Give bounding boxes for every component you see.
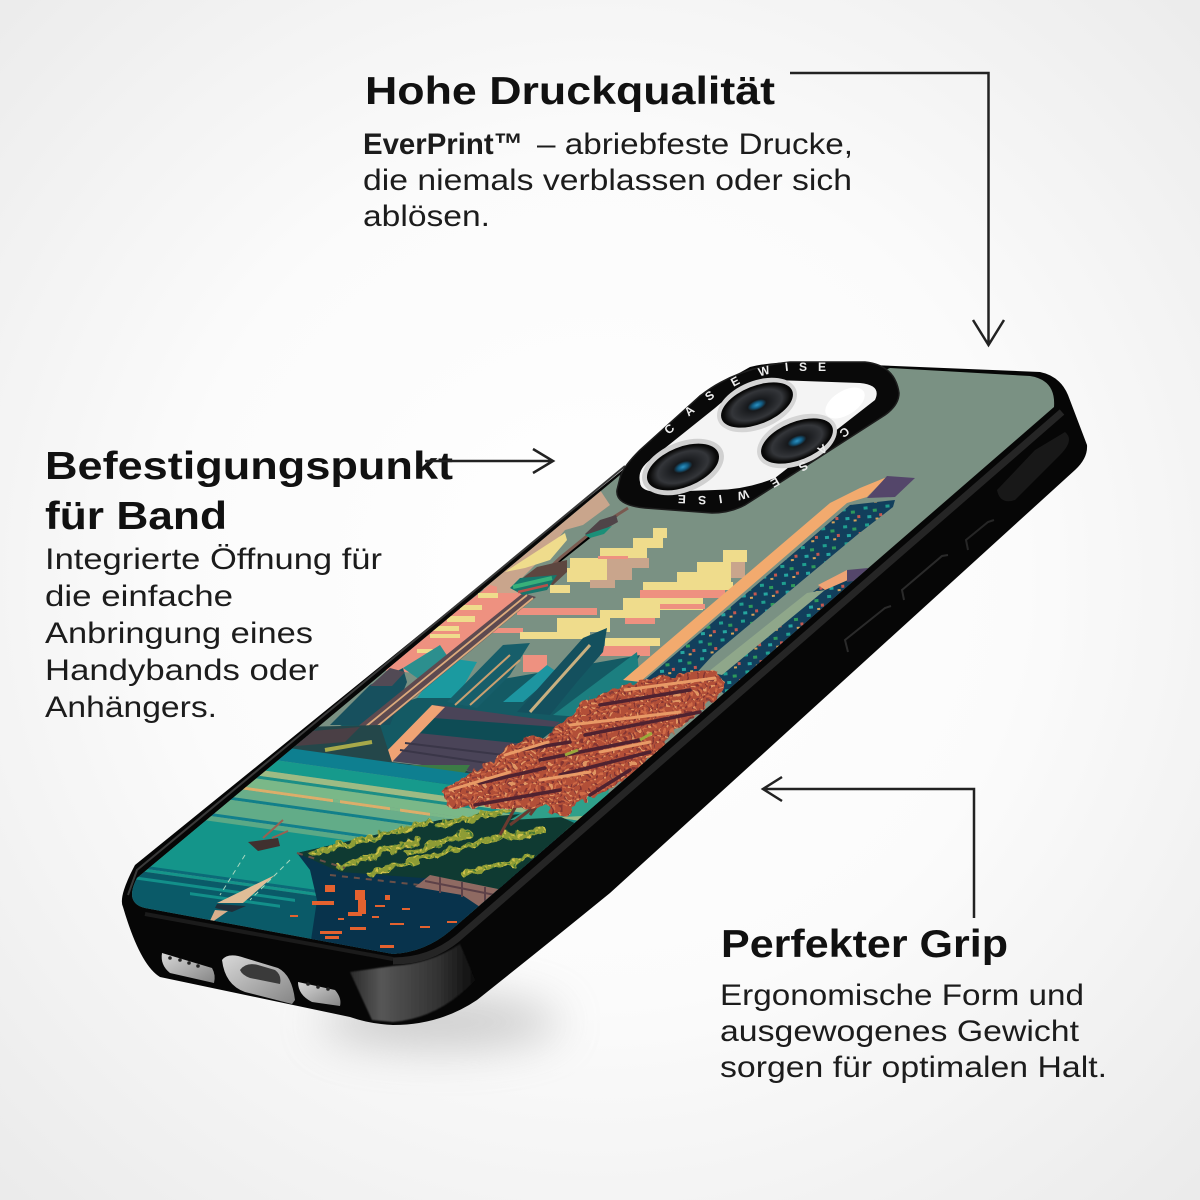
brand ring lettering: E [678,492,686,506]
rim bottom edge [145,914,393,959]
side mute switch [997,432,1069,501]
second skyscraper [705,568,868,700]
brand ring lettering: A [682,403,698,419]
plate shine [820,381,870,425]
heading: Hohe Druckqualität [365,70,775,113]
body text: Handybands oder [45,654,319,687]
tower needle and neck [552,506,629,564]
foliage highlights [450,678,715,790]
side button: volume down [845,606,891,652]
main pod [520,560,567,585]
callout: Perfekter Grip [720,923,1107,1084]
brand ring lettering: C [836,424,852,441]
brand ring lettering: E [818,360,826,374]
skyline [330,628,640,760]
teal gaps beside tree [510,788,610,820]
dark bush mass [300,814,574,892]
right speaker grille [298,982,340,1006]
sky [132,368,1054,954]
body text: Anhängers. [45,691,217,724]
infographic canvas [45,72,1104,1083]
lens left [634,428,732,506]
camera bump [617,360,899,513]
body text: sorgen für optimalen Halt. [720,1051,1107,1084]
charging port [222,955,295,1004]
body text: Integrierte Öffnung für [45,543,382,576]
low purple building [388,705,560,772]
rounded corner highlight [350,944,475,1022]
body text: die niemals verblassen oder sich [363,164,852,197]
brand ring lettering [661,360,852,507]
lens right [749,403,845,479]
brand ring lettering: I [718,492,723,506]
sunset band left of tower [380,490,610,680]
heading: Perfekter Grip [721,923,1008,966]
bushes [313,810,545,873]
orange reflections [290,885,457,948]
far shore [290,725,472,785]
body text: – abriebfeste Drucke, [537,128,853,161]
body text: die einfache [45,580,233,613]
body text [363,128,853,233]
arrow: print quality [790,73,1004,345]
body text [45,543,382,724]
heading: für Band [45,495,227,538]
body text: ablösen. [363,200,490,233]
brand ring lettering: S [698,493,706,507]
dark foreground water [298,820,566,954]
callout: Hohe Druckqualität [363,70,853,233]
tower shaft [357,593,536,730]
pier [415,875,503,907]
small pod [585,515,618,538]
stepping stones [297,853,420,885]
rim left edge [128,466,625,895]
arrow: grip [763,777,974,918]
foliage shadow streaks [475,690,700,805]
brand ring lettering: A [814,441,830,458]
foliage mass [442,672,725,817]
body text: Anbringung eines [45,617,313,650]
tree trunk [498,808,538,836]
brand ring lettering: E [728,373,742,390]
boat far [220,820,290,900]
case body [122,362,1087,1025]
brand ring lettering: S [799,360,807,374]
body text: Ergonomische Form und [720,979,1084,1012]
brand ring lettering: S [796,458,810,474]
side button: volume up [902,555,948,600]
callout: Befestigungspunkt [45,445,453,724]
tall skyscraper [623,476,915,682]
communications tower [357,508,628,730]
heading: Befestigungspunkt [45,445,453,488]
body text: ausgewogenes Gewicht [720,1015,1080,1048]
body text: EverPrint™ [363,128,523,161]
bump frame [617,362,899,513]
brand ring lettering: W [757,363,772,379]
brand ring lettering: E [768,474,782,491]
side button: action [966,520,994,550]
brand ring lettering: W [735,487,750,503]
lake water [132,748,609,954]
heading [45,445,453,538]
clouds [490,528,747,672]
brand ring lettering: C [661,421,677,437]
phone shadow [320,996,560,1048]
arrow: strap attachment [425,449,553,473]
printed artwork [132,368,1054,954]
sailboat [210,875,275,921]
autumn tree [442,672,725,835]
left speaker grille [162,953,215,983]
white camera plate [639,380,877,492]
foliage green accents [565,733,652,755]
brand ring lettering: S [702,388,717,404]
body text [720,979,1107,1084]
brand ring lettering: I [784,360,789,374]
phone case [122,362,1087,1025]
case rim highlight [393,412,1062,961]
lens top [709,367,805,443]
